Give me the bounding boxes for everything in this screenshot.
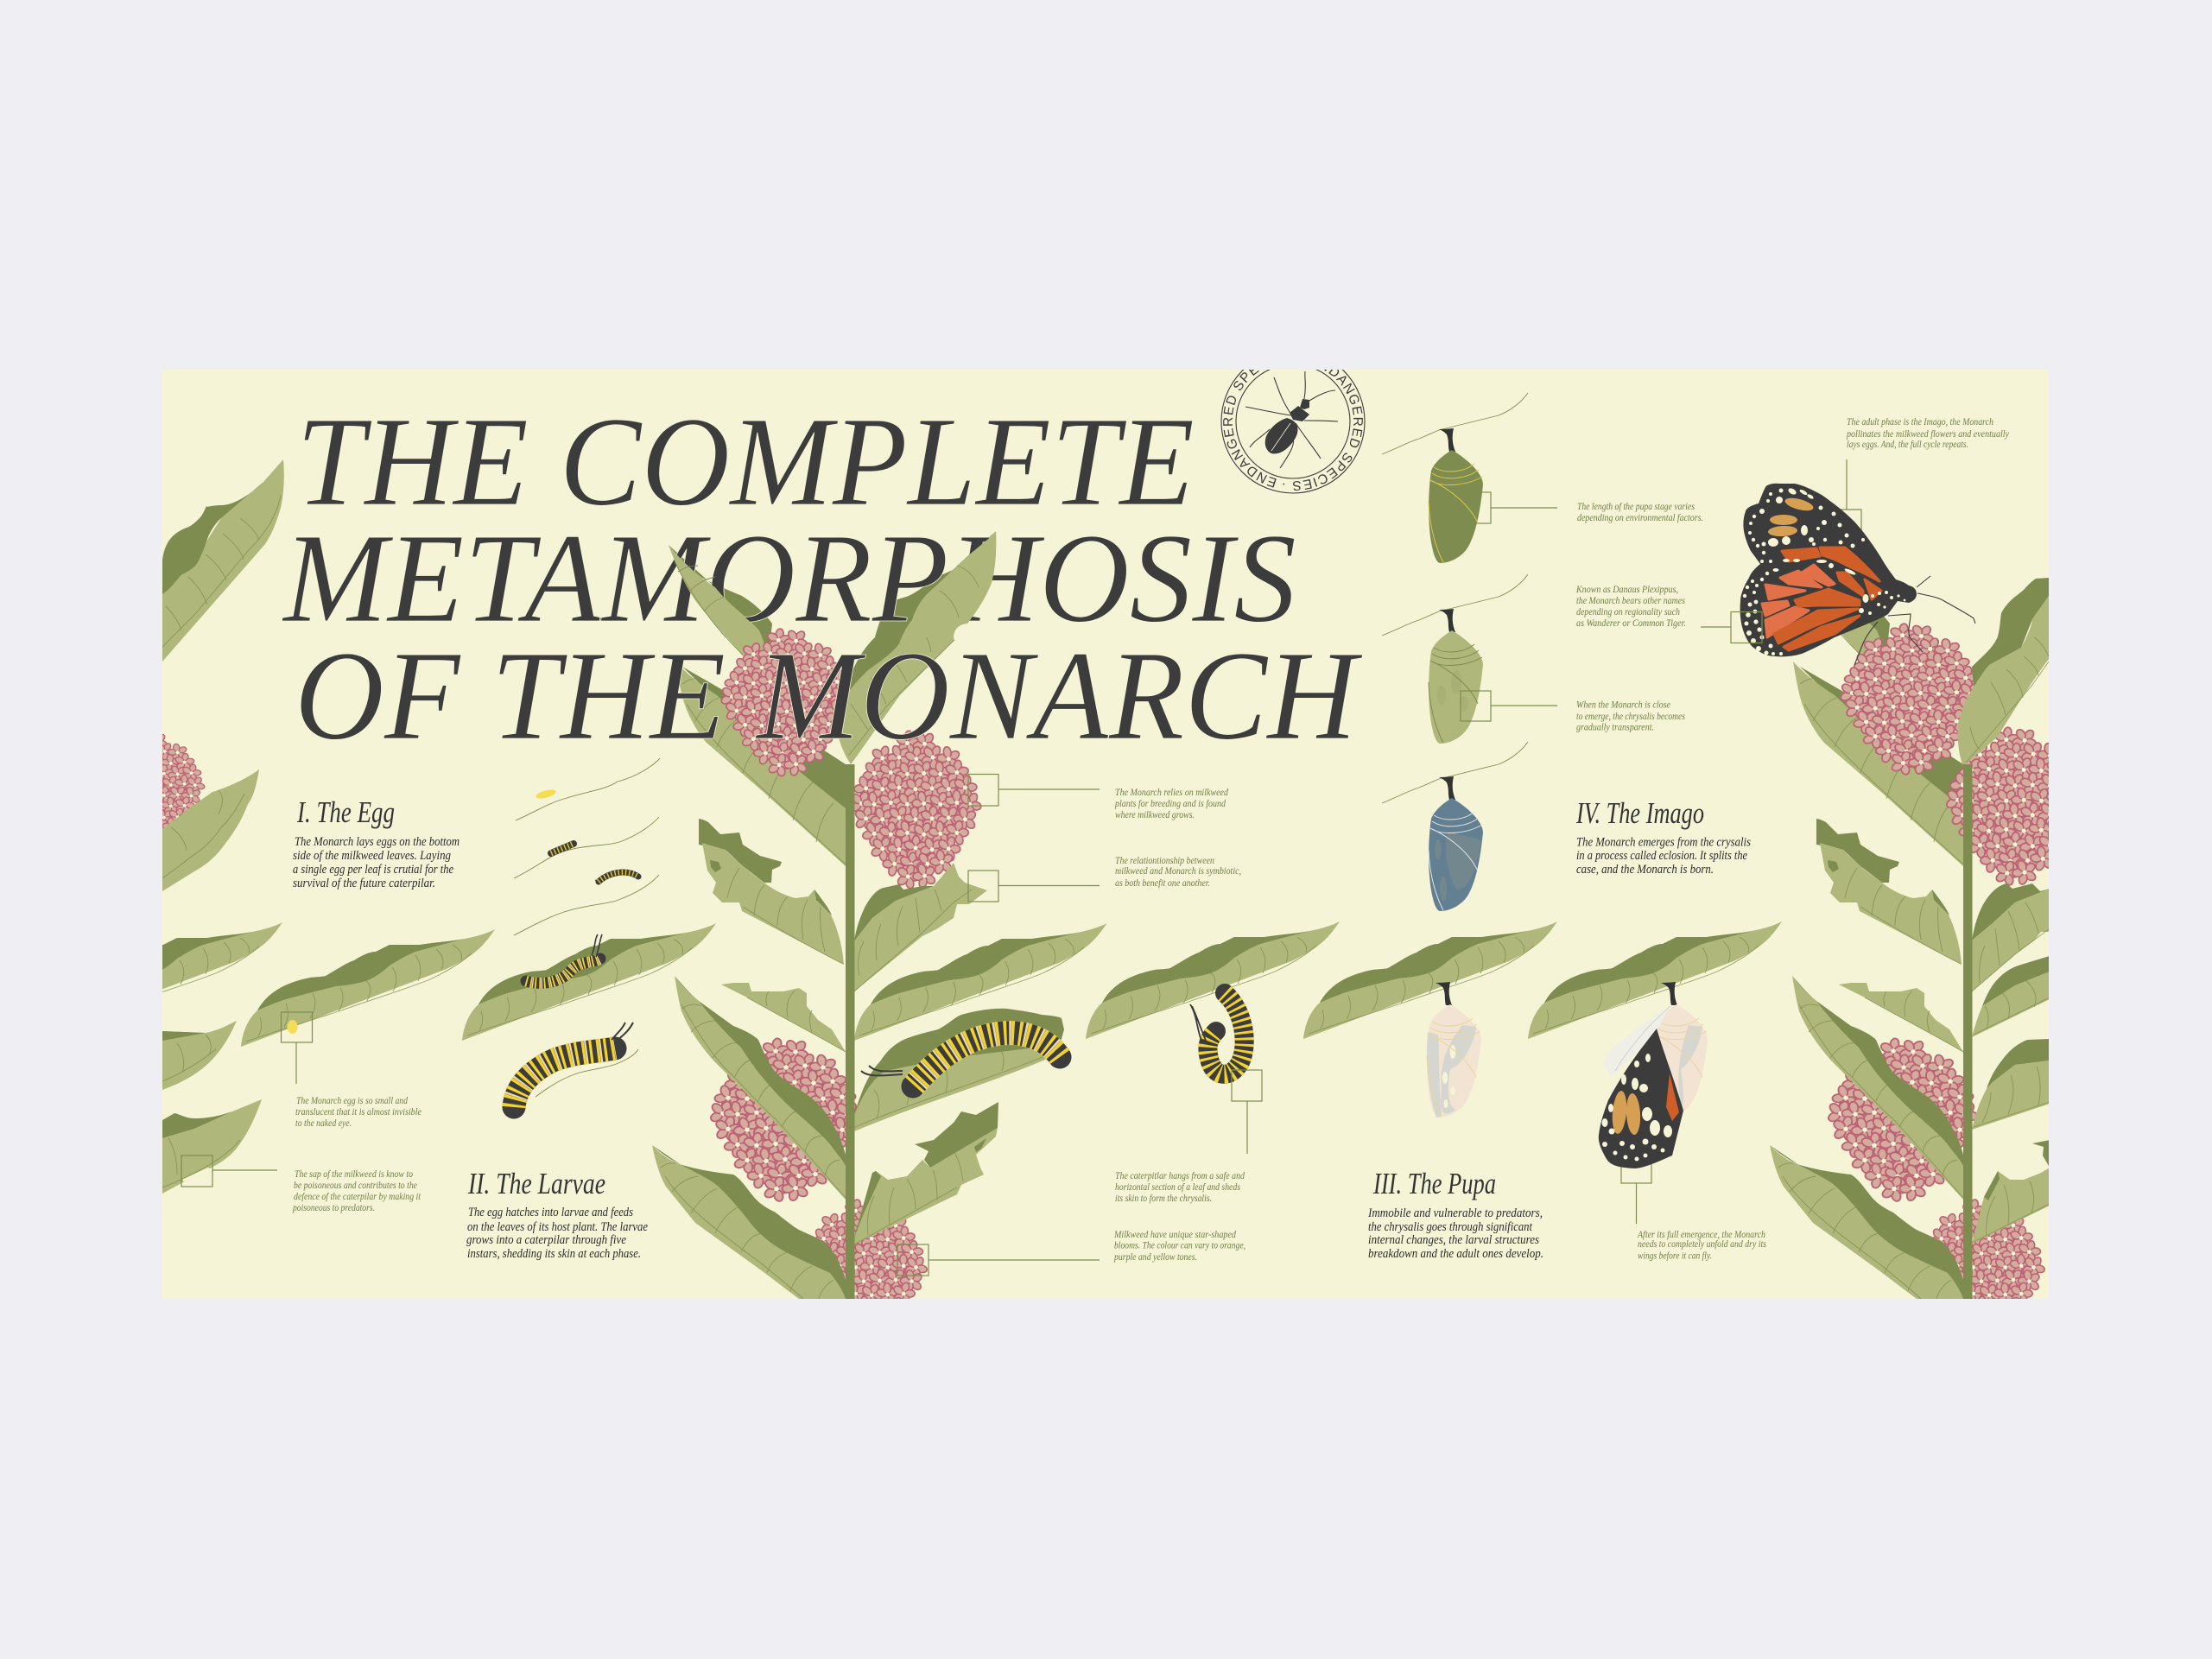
icon: small caterpillar: [595, 872, 638, 882]
text: caterpillar and bloom notes: The caterpitlar hangs from a safe and: [1115, 1171, 1245, 1181]
text: adult phase note: The adult phase is the Imago, the Monarch: [1847, 417, 1993, 427]
antennae and legs: [1854, 576, 1975, 665]
text: flower notes: plants for breeding and is found: [1114, 799, 1226, 809]
leaf: left second: [162, 769, 259, 891]
flower cluster: right plant right: [1946, 726, 2049, 886]
icon: large caterpillar on twig: [514, 1023, 633, 1107]
text: sap note: defence of the caterpilar by making it: [294, 1192, 421, 1202]
leaf: pupa leaf: [1303, 921, 1557, 1039]
text: transparent note: [1576, 700, 1685, 732]
stamp: endangered species beetle: [1220, 370, 1366, 494]
text: pupa length note: depending on environmental factors.: [1577, 513, 1703, 523]
text: transparent note: gradually transparent.: [1576, 722, 1654, 732]
leaf tips overlapping the title: [669, 531, 996, 696]
text: caterpillar and bloom notes: blooms. The colour can vary to orange,: [1114, 1240, 1245, 1251]
text: I. The Egg: side of the milkweed leaves. Laying: [293, 849, 451, 863]
text: II. The Larvae: II. The Larvae: [467, 1167, 605, 1200]
text: III. The Pupa: breakdown and the adult ones develop.: [1368, 1247, 1543, 1261]
text: I. The Egg: The Monarch lays eggs on the bottom: [295, 835, 460, 849]
dark wing: [1599, 1029, 1683, 1168]
text: egg note: The Monarch egg is so small and: [296, 1096, 408, 1106]
text: IV. The Imago: The Monarch emerges from the crysalis: [1576, 836, 1751, 850]
text: adult phase note: pollinates the milkweed flowers and eventually: [1846, 429, 2010, 440]
text: II. The Larvae: on the leaves of its host plant. The larvae: [467, 1220, 648, 1234]
text: II. The Larvae: grows into a caterpilar through five: [466, 1233, 627, 1247]
wing spots: [1601, 1054, 1672, 1161]
leaf: left fifth: [162, 1099, 262, 1194]
text: flower notes: The Monarch relies on milkweed: [1115, 788, 1228, 798]
leaf: right plant R2: [1972, 956, 2050, 1037]
leaf: under large caterpillar: [854, 1009, 1064, 1131]
chrysalis: green: [1429, 428, 1483, 563]
leaf: centre top right: [836, 531, 996, 764]
flower cluster: left edge: [162, 734, 206, 829]
text: III. The Pupa: [1367, 1167, 1543, 1261]
title: METAMORPHOSIS: [282, 508, 1296, 649]
hindwing cells dark: [1774, 573, 1881, 650]
leaf: small caterpillar leaf: [462, 923, 716, 1041]
chrysalis: pale green: [1429, 609, 1483, 744]
text: names note: the Monarch bears other names: [1576, 596, 1685, 606]
text: caterpillar and bloom notes: horizontal section of a leaf and sheds: [1115, 1182, 1240, 1193]
text: after emergence note: needs to completely unfold and dry its: [1638, 1239, 1766, 1250]
text: transparent note: When the Monarch is close: [1576, 700, 1670, 710]
text: III. The Pupa: the chrysalis goes through significant: [1368, 1220, 1533, 1234]
flower cluster: right plant upper: [1840, 623, 1976, 776]
icon: J-shaped caterpillar: [1190, 993, 1245, 1074]
text: III. The Pupa: internal changes, the larval structures: [1368, 1233, 1539, 1247]
text: flower notes: as both benefit one another.: [1115, 878, 1210, 889]
text: names note: as Wanderer or Common Tiger.: [1576, 618, 1686, 629]
forewing orange: [1782, 548, 1879, 581]
text: caterpillar and bloom notes: its skin to form the chrysalis.: [1115, 1194, 1212, 1204]
panel: left edge milkweed: [162, 459, 284, 1194]
text: sap note: The sap of the milkweed is know to: [295, 1169, 413, 1180]
text: flower notes: where milkweed grows.: [1115, 810, 1195, 820]
text: caterpillar and bloom notes: [1113, 1171, 1245, 1263]
chrysalis: emerging butterfly: [1599, 982, 1708, 1168]
text: flower notes: [1114, 788, 1241, 889]
callout: emerged butterfly: [1621, 1153, 1651, 1224]
chrysalis twigs: [1382, 393, 1528, 803]
right milkweed plant, left leaves: [1770, 545, 2050, 1350]
leaf: right plant top right: [1958, 578, 2049, 766]
chrysalis: transparent: [1427, 982, 1481, 1118]
forewing tan cells: [1768, 496, 1815, 537]
text: II. The Larvae: The egg hatches into larvae and feeds: [468, 1206, 633, 1219]
leaf: left third: [162, 922, 282, 992]
text: II. The Larvae: [466, 1167, 648, 1261]
text: after emergence note: After its full emergence, the Monarch: [1637, 1230, 1765, 1240]
wing orange cells: [1611, 1090, 1641, 1135]
text: egg note: to the naked eye.: [295, 1118, 352, 1129]
stem: right plant: [1963, 764, 1973, 1299]
stamp rings: [1221, 350, 1365, 493]
text: III. The Pupa: Immobile and vulnerable to predators,: [1367, 1206, 1543, 1220]
stem: centre plant: [846, 764, 855, 1299]
title: THE COMPLETE: [296, 391, 1195, 533]
callout boxes: flower and egg: [282, 774, 1100, 1276]
text: after emergence note: [1637, 1230, 1766, 1261]
leaf: right plant R4 bitten: [1972, 1140, 2050, 1244]
text: I. The Egg: a single egg per leaf is crutial for the: [293, 863, 453, 877]
leaf: emerging butterfly leaf: [1528, 921, 1782, 1039]
empty chrysalis case: [1653, 982, 1708, 1118]
text: I. The Egg: survival of the future caterpilar.: [293, 877, 435, 890]
text: pupa length note: The length of the pupa stage varies: [1577, 502, 1695, 512]
text: IV. The Imago: [1575, 796, 1751, 877]
flower cluster: centre right: [855, 730, 982, 889]
leaf: right plant R1: [1972, 883, 2050, 991]
text: after emergence note: wings before it can fly.: [1638, 1251, 1712, 1261]
icon: translucent egg on leaf: [287, 1020, 297, 1034]
leaf: centre right bitten: [854, 863, 998, 991]
icon: tiny caterpillar: [551, 844, 574, 853]
text: I. The Egg: [293, 795, 460, 890]
leaf: left top: [162, 459, 284, 662]
egg stage twigs: [514, 758, 660, 1097]
callout: adult: [1836, 459, 1861, 540]
text: IV. The Imago: case, and the Monarch is born.: [1576, 863, 1714, 877]
text: flower notes: The relationtionship between: [1115, 856, 1214, 866]
text: pupa length note: [1577, 502, 1703, 523]
text: sap note: be poisoneous and contributes to the: [294, 1181, 417, 1191]
callout: milkweed sap: [181, 1156, 277, 1187]
text: names note: depending on regionality such: [1576, 607, 1680, 617]
icon: large caterpillar on centre leaf: [861, 1033, 1060, 1086]
text: sap note: poisoneous to predators.: [292, 1203, 375, 1213]
text: III. The Pupa: III. The Pupa: [1372, 1167, 1496, 1200]
hindwing cells light: [1762, 565, 1835, 637]
hanging leaves row: [241, 921, 1782, 1047]
callout: wing box: [1731, 611, 1762, 643]
central milkweed plant, left leaves: [652, 545, 932, 1350]
leaf: J-caterpillar leaf: [1086, 921, 1340, 1039]
text: names note: [1575, 585, 1686, 629]
butterfly: monarch: [1740, 484, 1975, 665]
stamp text: ENDANGERED SPECIES · ENDANGERED SPECIES ·: [1223, 370, 1363, 491]
leaf: right plant R3: [1972, 1039, 2050, 1130]
flower cluster: centre top: [720, 628, 841, 777]
callout: wing: [1701, 626, 1731, 628]
text: transparent note: to emerge, the chrysalis becomes: [1576, 712, 1685, 722]
text: egg note: translucent that it is almost invisible: [295, 1107, 421, 1118]
chrysalis: blue: [1429, 776, 1483, 911]
text: egg note: [295, 1096, 421, 1129]
text: IV. The Imago: IV. The Imago: [1575, 796, 1704, 830]
icon: caterpillar on leaf: [526, 934, 602, 983]
text: caterpillar and bloom notes: purple and yellow tones.: [1113, 1252, 1197, 1263]
icon: yellow egg: [536, 789, 556, 799]
text: adult phase note: lays eggs. And, the full cycle repeats.: [1847, 440, 1968, 450]
callout: pale chrysalis: [1461, 691, 1557, 721]
text: caterpillar and bloom notes: Milkweed have unique star-shaped: [1113, 1230, 1236, 1240]
text: names note: Known as Danaus Plexippus,: [1575, 585, 1678, 595]
text: adult phase note: [1846, 417, 2010, 450]
leaf: egg leaf: [241, 929, 495, 1047]
wing red strip: [1666, 1073, 1679, 1121]
icon: beetle: [1245, 371, 1338, 468]
pale folded wing: [1604, 1004, 1670, 1077]
wings: [1740, 484, 1917, 656]
callout: caterpillar: [1232, 1070, 1262, 1154]
wing spots: [1743, 487, 1905, 655]
text: sap note: [292, 1169, 421, 1213]
leaf: centre right bottom bitten: [854, 1102, 998, 1244]
leaf: left fourth: [162, 1021, 237, 1090]
callout: green chrysalis: [1461, 492, 1557, 523]
infographic panel: [162, 370, 2049, 1299]
title: [282, 391, 1363, 767]
text: flower notes: milkweed and Monarch is symbiotic,: [1115, 866, 1241, 877]
title: OF THE MONARCH: [295, 625, 1363, 767]
text: II. The Larvae: instars, shedding its skin at each phase.: [467, 1247, 641, 1261]
text: I. The Egg: I. The Egg: [296, 795, 395, 829]
leaf: centre right long: [854, 923, 1107, 1041]
text: IV. The Imago: in a process called eclosion. It splits the: [1576, 849, 1747, 863]
